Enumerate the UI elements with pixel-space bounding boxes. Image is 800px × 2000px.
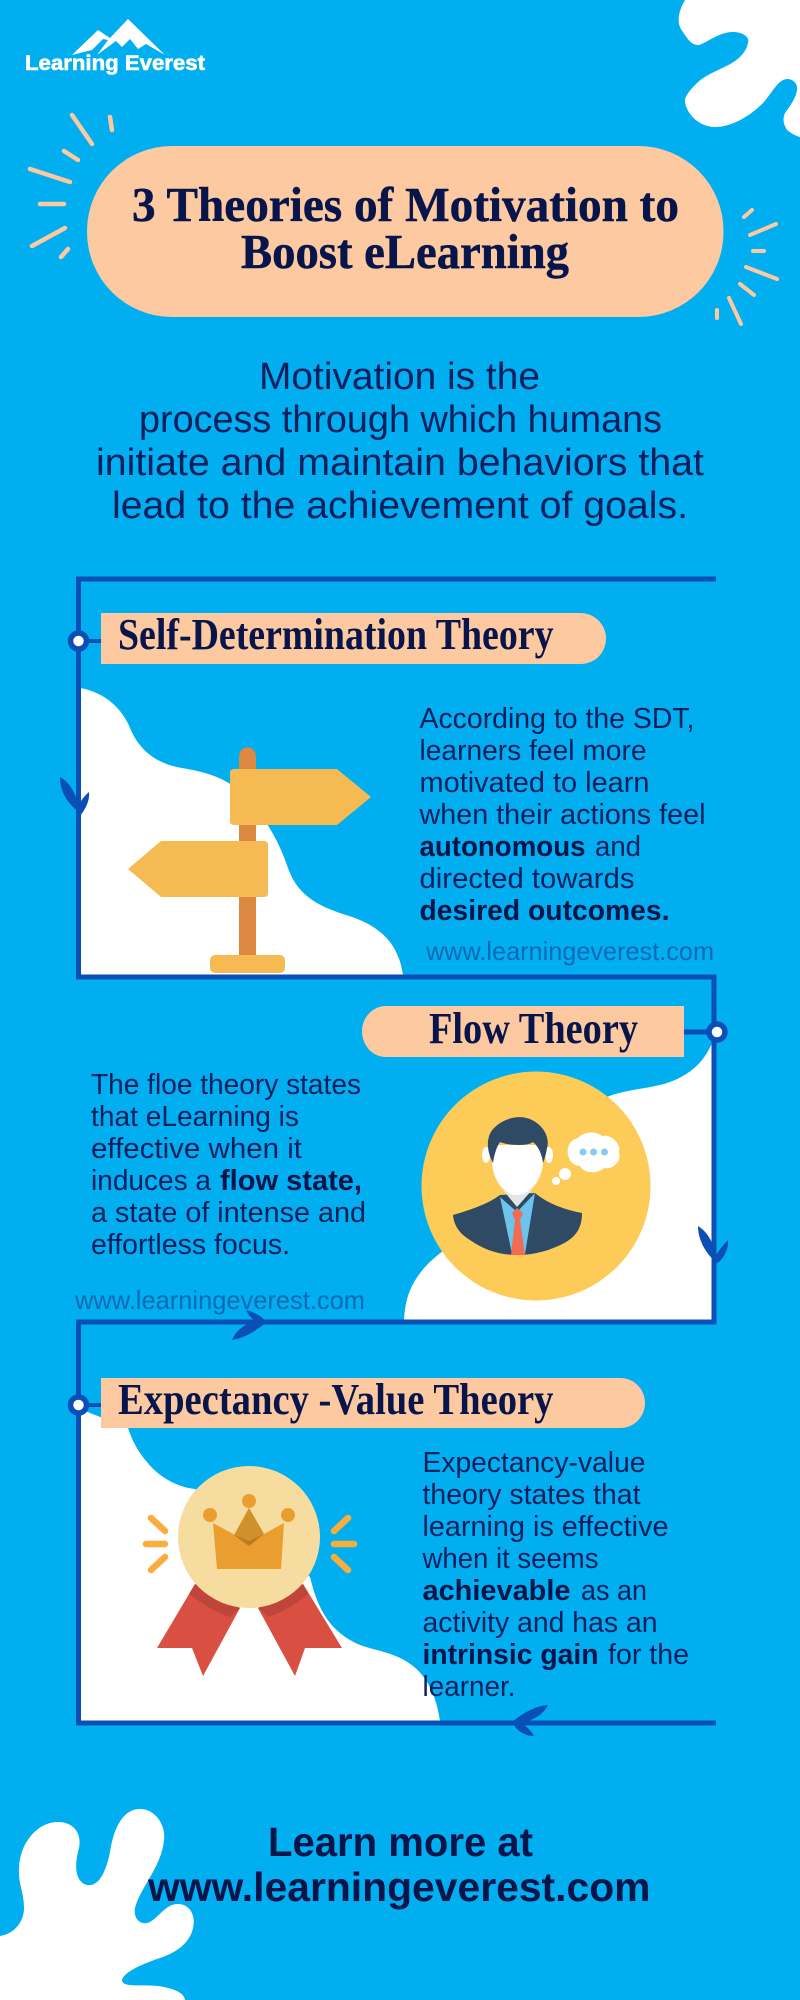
- decorative white splash: bottom left: [0, 1809, 194, 2000]
- text: SDT description: when their actions feel: [419, 799, 706, 831]
- heading: Flow Theory: Flow Theory: [429, 1004, 638, 1053]
- text: SDT description: directed towards: [420, 863, 634, 895]
- text: Flow description: flow state,: [220, 1165, 362, 1197]
- text: Expectancy-value description: [422, 1447, 689, 1703]
- text: Flow description: effortless focus.: [91, 1229, 290, 1261]
- title sparks: right: [717, 210, 777, 324]
- arrow leaf: right frame: [698, 1226, 728, 1264]
- text: Expectancy-value description: learner.: [422, 1671, 516, 1703]
- logo: Learning Everest: [25, 19, 205, 75]
- watermark 1: www.learningeverest.com: [425, 936, 714, 966]
- heading: Flow Theory: [362, 1004, 725, 1057]
- text: Expectancy-value description: theory states that: [422, 1479, 640, 1511]
- text: SDT description: [419, 703, 706, 927]
- heading: Self-Determination Theory: Self-Determination Theory: [118, 610, 554, 659]
- text: Expectancy-value description: learning is effective: [422, 1511, 668, 1543]
- intro text: Motivation is the: [259, 356, 540, 398]
- logo: Learning Everest: Learning Everest: [25, 52, 205, 75]
- title banner: 3 Theories of Motivation to: [132, 177, 679, 232]
- icon: medal with crown: [146, 1466, 354, 1676]
- text: Flow description: [91, 1069, 366, 1261]
- text: Flow description: induces a: [91, 1165, 212, 1197]
- panel: white blob expectancy: [80, 1409, 440, 1721]
- arrow leaf: middle frame: [232, 1310, 266, 1340]
- text: SDT description: and: [595, 831, 641, 863]
- footer call to action: www.learningeverest.com: [147, 1864, 650, 1910]
- icon: signpost: [128, 747, 371, 973]
- title sparks: left: [30, 115, 112, 257]
- text: Expectancy-value description: when it seems: [422, 1543, 598, 1575]
- icon: businessman with thought bubble: [422, 1072, 650, 1300]
- title banner: [87, 146, 724, 317]
- connector frame: [76, 579, 716, 1723]
- text: SDT description: learners feel more: [420, 735, 646, 767]
- title banner: Boost eLearning: [241, 224, 569, 279]
- text: Flow description: a state of intense and: [91, 1197, 366, 1229]
- text: SDT description: According to the SDT,: [420, 703, 694, 735]
- intro text: lead to the achievement of goals.: [112, 485, 688, 527]
- intro text: [96, 356, 704, 527]
- text: Expectancy-value description: for the: [608, 1639, 689, 1671]
- panel: white blob self-determination: [80, 688, 403, 975]
- text: Expectancy-value description: intrinsic gain: [422, 1639, 598, 1671]
- text: Expectancy-value description: achievable: [422, 1575, 570, 1607]
- text: SDT description: desired outcomes.: [420, 895, 670, 927]
- text: Flow description: that eLearning is: [91, 1101, 299, 1133]
- arrow leaf: left frame: [60, 777, 89, 818]
- watermark 2: www.learningeverest.com: [74, 1285, 365, 1315]
- text: Expectancy-value description: Expectancy-value: [422, 1447, 646, 1479]
- intro text: process through which humans: [139, 399, 662, 441]
- intro text: initiate and maintain behaviors that: [96, 442, 704, 484]
- text: Flow description: effective when it: [91, 1133, 302, 1165]
- text: SDT description: autonomous: [420, 831, 586, 863]
- decorative white splash: top right: [679, 0, 800, 137]
- arrow leaf: bottom frame: [512, 1705, 548, 1736]
- text: SDT description: motivated to learn: [420, 767, 650, 799]
- footer call to action: [147, 1819, 650, 1910]
- text: Expectancy-value description: as an: [581, 1575, 647, 1607]
- heading: Expectancy-Value Theory: Expectancy -Value Theory: [118, 1375, 554, 1424]
- text: Expectancy-value description: activity and has an: [422, 1607, 658, 1639]
- panel: white blob flow: [404, 1043, 712, 1320]
- text: Flow description: The floe theory states: [91, 1069, 361, 1101]
- footer call to action: Learn more at: [268, 1819, 533, 1865]
